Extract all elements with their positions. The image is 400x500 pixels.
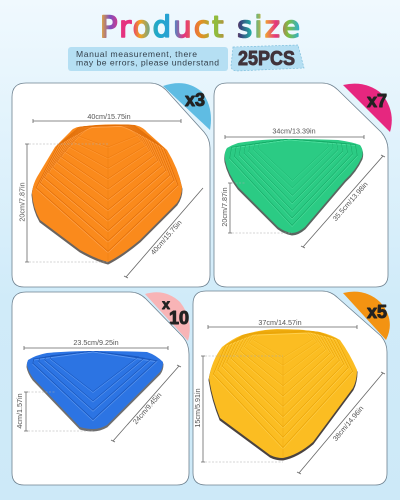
dimensions	[18, 112, 203, 278]
dimensions: 4cm/1.57in	[15, 393, 24, 429]
dimensions	[220, 126, 385, 248]
orange stone graphic	[32, 124, 182, 264]
card	[12, 292, 189, 485]
dimensions: 24cm/9.45in	[131, 391, 163, 426]
title: Product size	[100, 10, 300, 44]
blue stone graphic	[27, 351, 163, 431]
badge: x5: x5	[367, 302, 387, 322]
badge: x5	[343, 292, 390, 340]
dimensions	[193, 318, 385, 474]
dimensions: 35.5cm/13.98in	[331, 180, 370, 223]
badge: x10: 10	[169, 308, 189, 328]
quantity tag: 25PCS: 25PCS	[238, 48, 295, 70]
dimensions: 40cm/15.75in	[87, 112, 131, 121]
panel: orange stone	[12, 83, 211, 287]
dimensions: 23.5cm/9.25in	[73, 338, 119, 347]
dimensions: 15cm/5.91in	[193, 388, 202, 428]
badge: x10: x	[162, 296, 170, 312]
dimensions: 20cm/7.87in	[18, 182, 26, 222]
dimensions: 38cm/14.96in	[331, 404, 365, 443]
green stone graphic	[225, 139, 363, 235]
note box: Manual measurement, there	[76, 49, 197, 59]
badge: x3	[163, 83, 211, 130]
card	[214, 83, 388, 287]
note box: may be errors, please understand	[76, 58, 219, 68]
dimensions: 20cm/7.87in	[220, 187, 229, 227]
dimensions: 37cm/14.57in	[258, 318, 302, 327]
badge: x7	[343, 84, 392, 132]
badge: x7: x7	[367, 91, 387, 111]
card	[12, 83, 210, 287]
dimensions: 34cm/13.39in	[272, 126, 316, 136]
badge: x3: x3	[185, 90, 205, 110]
dimensions	[15, 338, 181, 442]
dimensions: 40cm/15.75in	[149, 218, 184, 257]
panel: yellow stone	[193, 291, 390, 485]
badge: x10	[145, 292, 190, 341]
panel: blue stone	[12, 292, 190, 485]
panel: green stone	[214, 83, 392, 287]
yellow stone graphic	[209, 329, 357, 460]
note box	[68, 47, 228, 71]
card	[193, 291, 387, 485]
